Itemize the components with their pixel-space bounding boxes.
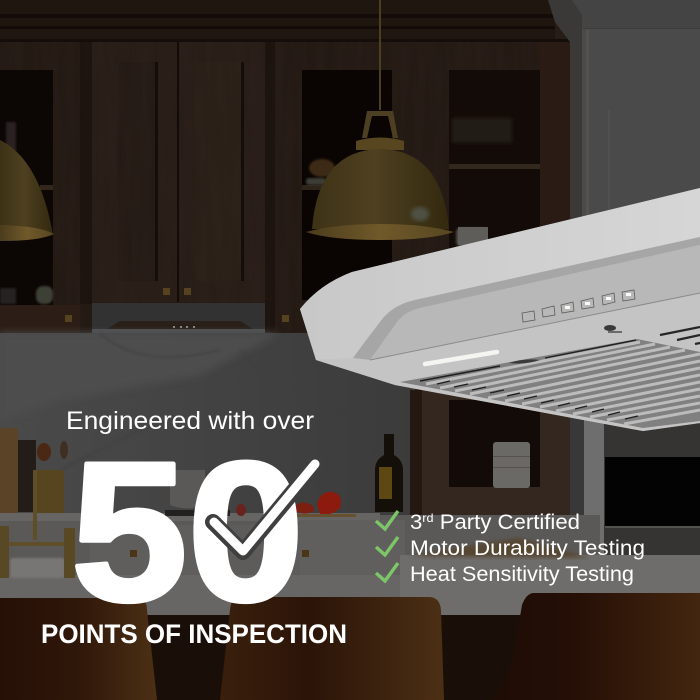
- left glass cabinet: [0, 70, 80, 332]
- checkmark: [213, 464, 316, 552]
- underside: [316, 293, 700, 431]
- product: stainless under-cabinet range hood: [300, 188, 700, 431]
- dark slot: [509, 359, 540, 364]
- cabinet handles: [65, 288, 289, 322]
- item: heat sensitivity testing: Heat Sensitivity Testing: [410, 563, 634, 586]
- item: 3rd party certified: rd: [422, 511, 434, 525]
- right wall: [548, 0, 700, 260]
- control buttons: [522, 290, 635, 322]
- filter grille: [400, 339, 700, 428]
- curved trim band: [353, 237, 700, 360]
- hood body: [300, 188, 700, 431]
- item: 3rd party certified: Party Certified: [434, 511, 580, 534]
- far right glass cabinet: [449, 70, 540, 268]
- heading: Engineered with over: Engineered with over: [66, 407, 314, 435]
- LED light strip: [425, 352, 497, 364]
- hood top face: [300, 188, 700, 360]
- marble backsplash: [0, 333, 415, 518]
- brand logo dot: [604, 325, 622, 333]
- stacked bowls: [493, 442, 530, 488]
- number 50: 50: [71, 421, 304, 642]
- heading: points of inspection: POINTS OF INSPECTION: [41, 619, 347, 649]
- countertop and lower cabinets: [0, 513, 700, 617]
- checklist: [376, 511, 645, 586]
- item: 3rd party certified: 3: [410, 511, 422, 534]
- mug on shelf: [458, 227, 488, 245]
- hanging lamp left: [0, 140, 54, 241]
- lower right wood cabinet: [410, 390, 585, 520]
- lower dark band and bar stools: [0, 593, 700, 700]
- small range hood in the scene: [92, 303, 265, 333]
- front control panel: [370, 245, 700, 360]
- item: 3rd party certified: [376, 511, 580, 534]
- upper wood cabinets: [0, 0, 570, 333]
- hanging lamp center: [306, 0, 454, 240]
- center-right glass cabinet: [302, 70, 392, 300]
- column and oven: [570, 390, 700, 565]
- item: motor durability testing: Motor Durability Testing: [410, 537, 645, 560]
- right filter vents: [660, 327, 700, 344]
- big number 50 with checkmark: [71, 421, 316, 642]
- utensils, faucet and counter objects: [0, 428, 403, 578]
- oil bottle: [375, 434, 403, 512]
